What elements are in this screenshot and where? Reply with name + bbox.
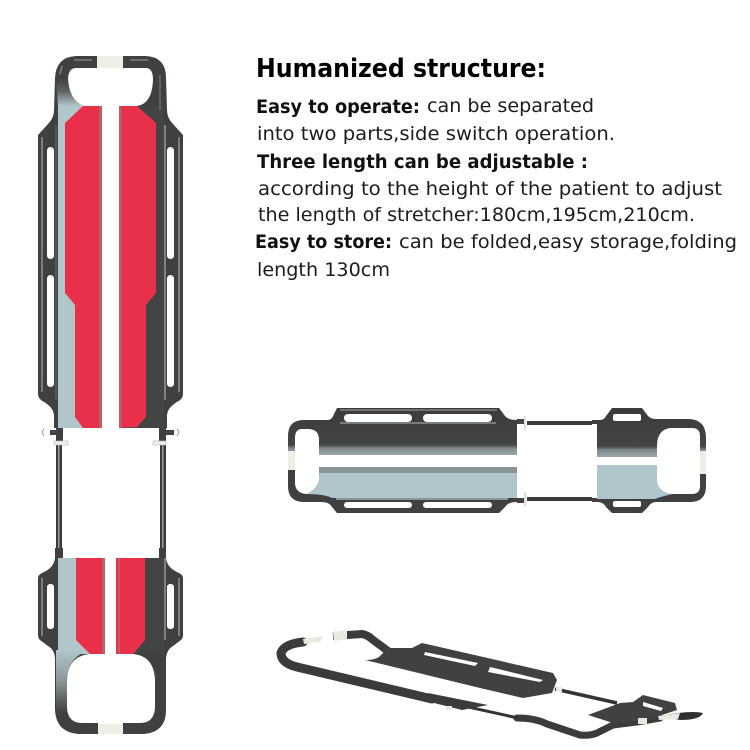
left section top half: [288, 408, 517, 455]
red pad lower left: [76, 558, 105, 654]
white handle band bottom: [98, 724, 123, 734]
upper section right half: [119, 56, 183, 428]
near mini panel: [428, 693, 488, 710]
lower neck fade: [56, 650, 90, 712]
slots lower: [47, 584, 174, 629]
left grey-blue panel: [58, 106, 102, 428]
white clamps: [303, 630, 680, 724]
title: Humanized structure:: [256, 54, 546, 84]
main panel: [365, 643, 557, 698]
feature: three length adjustable: the length of stretcher:180cm,195cm,210cm.: [258, 204, 695, 226]
white band left: [288, 451, 295, 470]
feature: easy to operate: [256, 95, 615, 145]
second panel: [588, 695, 677, 723]
right dark panel: [119, 106, 164, 428]
feature: easy to operate: can be separated: [427, 95, 594, 117]
left neck fade: [56, 78, 84, 106]
stretcher: folded perspective view: [281, 630, 703, 735]
left section bottom tube: [288, 470, 517, 513]
near rail tube: [281, 642, 432, 699]
stretcher: vertical front view: [38, 56, 183, 734]
near rod: [432, 699, 518, 718]
red pad upper right: [119, 106, 156, 428]
feature: easy to store: can be folded,easy storage,folding: [399, 231, 737, 253]
slots left: [344, 414, 492, 508]
far rod: [555, 689, 617, 703]
right section bottom tube: [592, 473, 706, 513]
upper rail: [333, 634, 388, 651]
clamps: [42, 429, 179, 445]
right section bottom panel: [597, 465, 672, 500]
feature: easy to operate: into two parts,side switch operation.: [257, 123, 615, 145]
slots right: [613, 414, 641, 507]
feature: easy to store: [255, 231, 737, 281]
feature: easy to store: length 130cm: [257, 259, 390, 281]
feature: three length adjustable: Three length can be adjustable :: [257, 152, 588, 173]
white handle band top: [97, 56, 123, 68]
rods: [517, 416, 592, 506]
red pad lower right: [116, 558, 145, 654]
feature: easy to operate: Easy to operate:: [256, 97, 420, 118]
rods: [56, 428, 166, 552]
feature: easy to store: Easy to store:: [255, 232, 392, 253]
left section bottom half panel: [306, 467, 517, 500]
feature: three length adjustable: according to the height of the patient to adjust: [258, 178, 722, 200]
tube highlights: [42, 60, 179, 400]
stretcher: horizontal top view: [288, 408, 706, 513]
text block: features: [255, 95, 737, 281]
slots perspective: [424, 652, 543, 682]
lower section: [38, 548, 105, 734]
slots upper: [47, 147, 174, 387]
right section top half: [592, 408, 706, 457]
feature: three length adjustable: [257, 152, 722, 226]
white band right: [700, 451, 706, 474]
red pad upper left: [65, 106, 102, 428]
upper section left half: [38, 56, 102, 428]
